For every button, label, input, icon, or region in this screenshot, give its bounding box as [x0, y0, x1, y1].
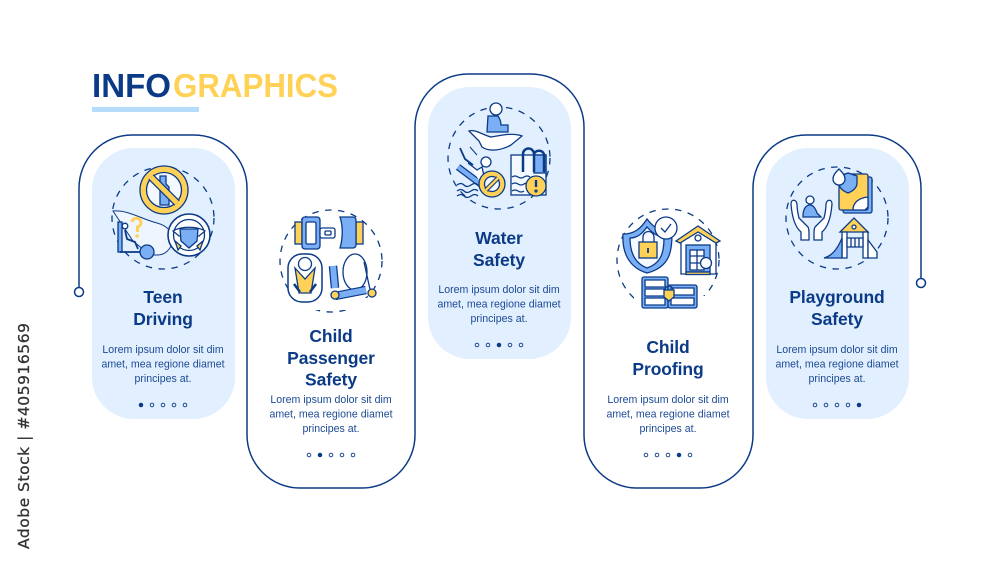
heading: Playground Safety: Safety — [811, 309, 863, 329]
panel: teen driving background — [92, 148, 235, 419]
text: Child Passenger body: amet, mea regione diamet — [269, 408, 393, 420]
text: Playground Safety body: amet, mea regione diamet — [775, 358, 899, 370]
title: GRAPHICS — [173, 67, 338, 104]
text: Playground Safety body: principes at. — [808, 373, 866, 385]
text: Child Passenger body: principes at. — [302, 423, 360, 435]
heading: Playground Safety: Playground — [789, 287, 885, 307]
heading: Teen Driving: Driving — [133, 309, 193, 329]
panel: water safety background — [428, 87, 571, 359]
text: Teen Driving body: principes at. — [134, 373, 192, 385]
heading: Child Proofing: Child — [646, 337, 690, 357]
text: Teen Driving body: Lorem ipsum dolor sit dim — [102, 344, 224, 356]
heading: Child Passenger Safety: Safety — [305, 370, 357, 390]
pagination dots: Child Proofing — [644, 453, 692, 457]
icon: child proofing — [617, 209, 720, 314]
heading: Child Proofing: Proofing — [632, 359, 704, 379]
stock watermark id: Adobe Stock | #405916569 — [15, 323, 33, 549]
text: Playground Safety body: Lorem ipsum dolor sit dim — [776, 344, 898, 356]
title underline — [92, 107, 199, 112]
heading: Teen Driving: Teen — [143, 287, 183, 307]
text: Child Proofing body: principes at. — [639, 423, 697, 435]
text: Water Safety body: Lorem ipsum dolor sit dim — [438, 284, 560, 296]
panel: playground safety background — [766, 148, 909, 419]
title: INFO — [92, 67, 171, 104]
text: Teen Driving body: amet, mea regione diamet — [101, 358, 225, 370]
heading: Water Safety: Water — [475, 228, 523, 248]
text: Child Proofing body: Lorem ipsum dolor sit dim — [607, 394, 729, 406]
icon: child passenger safety — [280, 210, 382, 312]
text: Water Safety body: amet, mea regione diamet — [437, 298, 561, 310]
pagination dots: Child Passenger — [307, 453, 355, 457]
icon: playground safety — [786, 167, 888, 269]
serpentine outline connecting panels — [74, 74, 926, 488]
text: Child Proofing body: amet, mea regione diamet — [606, 408, 730, 420]
pagination dots: Playground Safety — [813, 403, 861, 407]
icon: water safety — [448, 103, 550, 209]
pagination dots: Water Safety — [475, 343, 523, 347]
text: Water Safety body: principes at. — [470, 313, 528, 325]
heading: Child Passenger Safety: Child — [309, 326, 353, 346]
pagination dots: Teen Driving — [139, 403, 187, 407]
heading: Child Passenger Safety: Passenger — [287, 348, 375, 368]
text: Child Passenger body: Lorem ipsum dolor sit dim — [270, 394, 392, 406]
icon: teen driving — [112, 166, 214, 269]
title — [92, 67, 338, 104]
heading: Water Safety: Safety — [473, 250, 525, 270]
